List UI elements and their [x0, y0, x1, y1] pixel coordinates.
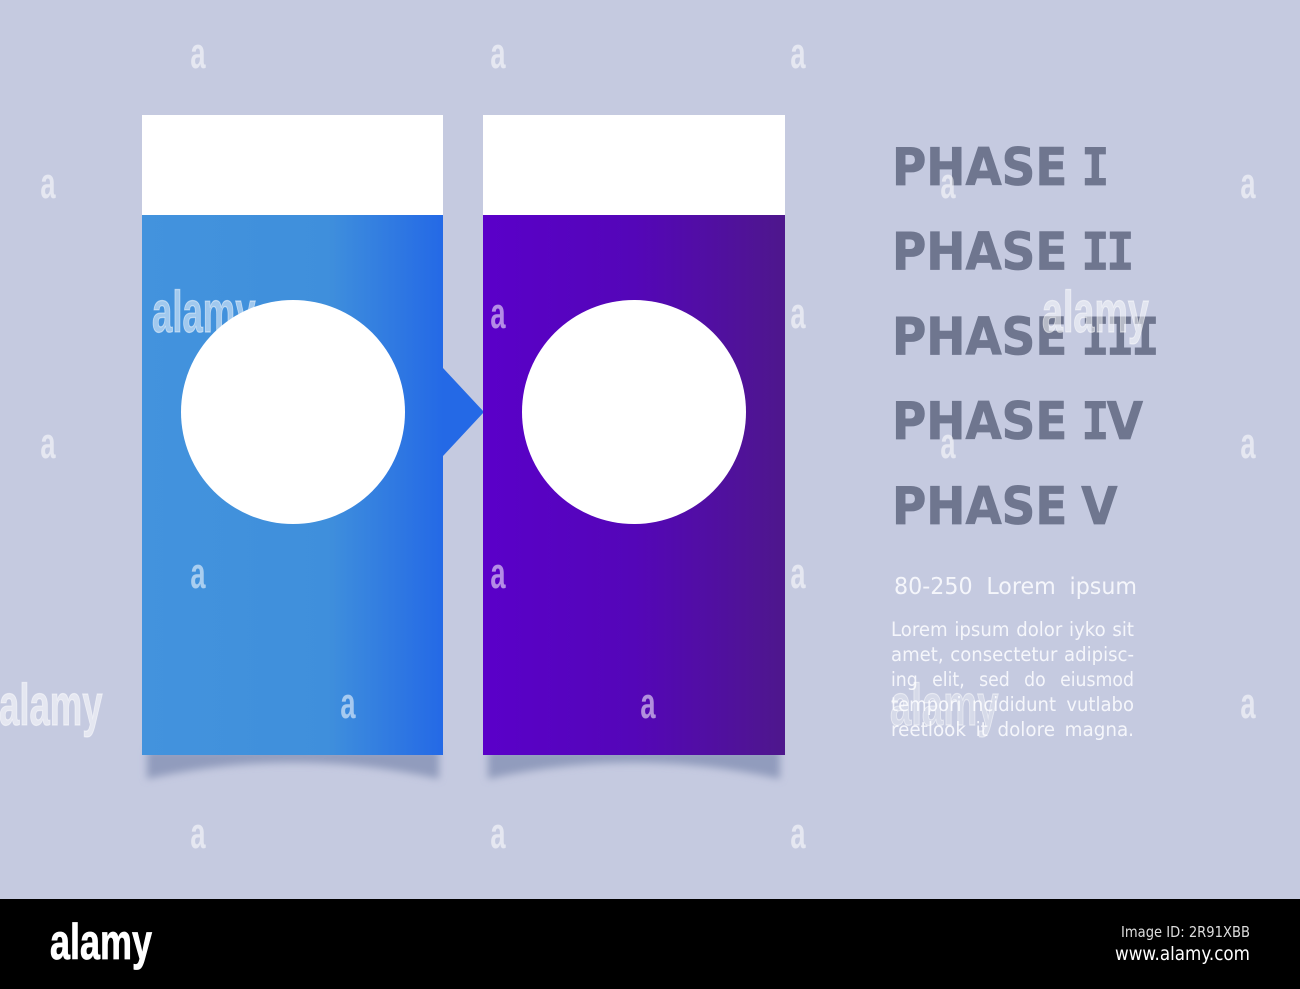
watermarks: a	[40, 158, 56, 208]
footer bar	[0, 899, 1300, 989]
blue card white header	[142, 115, 443, 215]
heading: phase V: PHASE V	[892, 476, 1118, 537]
big watermark on blue card: alamy	[152, 281, 256, 345]
watermarks: a	[640, 678, 656, 728]
purple card white circle	[522, 300, 746, 524]
watermarks: a	[490, 548, 506, 598]
website: www.alamy.com	[1115, 943, 1250, 965]
purple card body	[483, 215, 785, 755]
watermarks: a	[40, 418, 56, 468]
panel: blue card	[142, 115, 484, 779]
watermarks: alamy	[0, 674, 103, 738]
watermarks: a	[790, 28, 806, 78]
watermarks: a	[1240, 678, 1256, 728]
card shadow: purple	[488, 750, 780, 779]
body text	[891, 618, 1134, 741]
subheading: 80-250 Lorem ipsum	[894, 574, 1137, 600]
body text: ing elit, sed do eiusmod	[891, 668, 1134, 691]
heading: phase III: PHASE III	[892, 306, 1156, 367]
watermarks: alamy	[1042, 281, 1149, 345]
watermarks: a	[790, 288, 806, 338]
panel: purple card	[483, 115, 785, 779]
body text: reetlook it dolore magna.	[891, 718, 1134, 741]
watermarks: a	[790, 548, 806, 598]
heading: phase I: PHASE I	[892, 137, 1109, 198]
watermarks: a	[490, 288, 506, 338]
watermarks: a	[190, 808, 206, 858]
body text: amet, consectetur adipisc-	[891, 643, 1134, 666]
watermarks: a	[490, 808, 506, 858]
image id: Image ID: 2R91XBB	[1121, 923, 1250, 941]
arrow pointing right	[443, 368, 484, 456]
purple card white header	[483, 115, 785, 215]
heading: phase II: PHASE II	[892, 221, 1131, 282]
footer logo: alamy	[50, 915, 152, 970]
watermarks: alamy	[890, 674, 999, 738]
watermarks: a	[940, 418, 956, 468]
blue card body	[142, 215, 443, 755]
phase list	[892, 137, 1156, 537]
watermarks: a	[1240, 418, 1256, 468]
body text: tempori ncididunt vutlabo	[891, 693, 1134, 716]
watermarks: a	[490, 28, 506, 78]
watermarks: a	[790, 808, 806, 858]
watermarks: a	[1240, 158, 1256, 208]
watermarks: a	[190, 548, 206, 598]
heading: phase IV: PHASE IV	[892, 391, 1144, 452]
watermarks: a	[190, 28, 206, 78]
card shadow: blue	[147, 750, 439, 779]
blue card white circle	[181, 300, 405, 524]
body text: Lorem ipsum dolor iyko sit	[891, 618, 1134, 641]
watermarks: a	[940, 158, 956, 208]
watermarks: a	[340, 678, 356, 728]
